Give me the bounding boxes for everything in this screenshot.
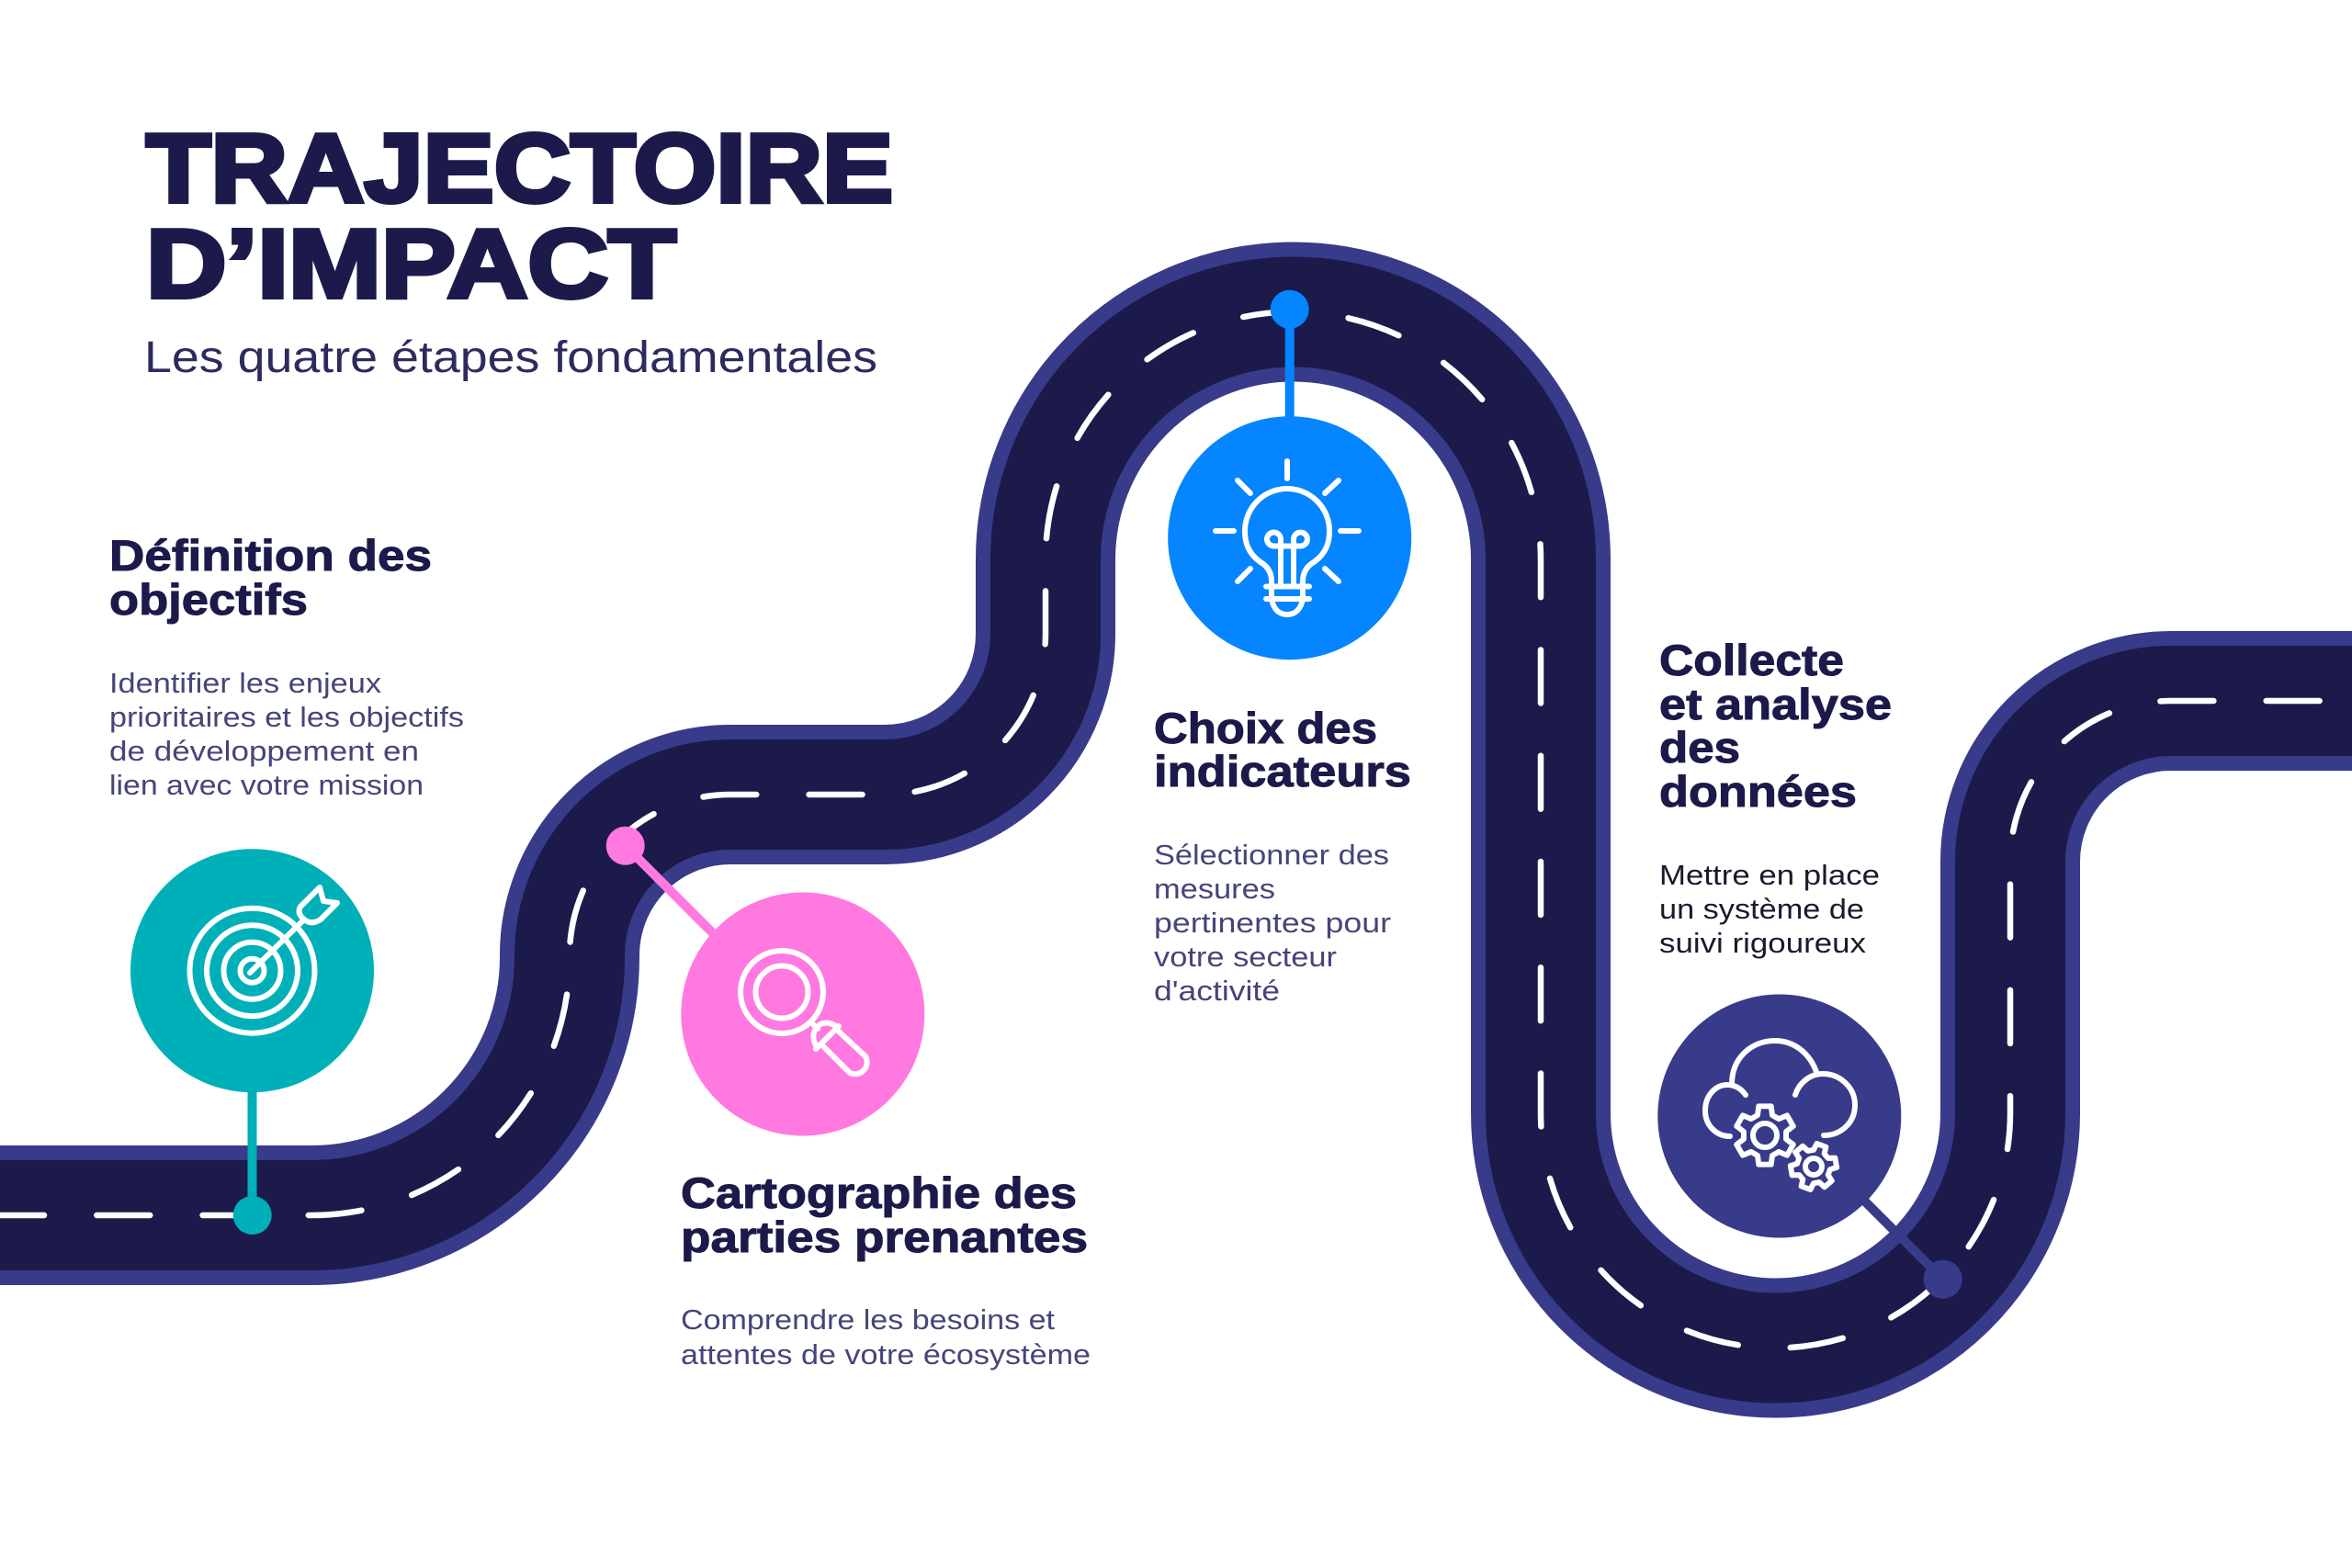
description [681,1303,1091,1371]
heading: Collecte [1659,636,1844,684]
heading: indicateurs [1154,747,1411,795]
step 4: data [1657,636,1962,1299]
description: Mettre en place [1659,859,1880,891]
description: Comprendre les besoins et [681,1303,1055,1336]
connector and node [1271,290,1309,427]
description [1154,839,1391,1007]
description: un système de [1659,893,1864,925]
heading [681,1168,1088,1261]
description [1659,859,1880,959]
description: suivi rigoureux [1659,927,1867,959]
description: prioritaires et les objectifs [109,701,464,733]
description: Sélectionner des [1154,839,1389,871]
description: pertinentes pour [1154,907,1391,939]
heading [1659,636,1892,816]
step 1: objectives [109,531,464,1235]
description: attentes de votre écosystème [681,1338,1091,1371]
heading: Cartographie des [681,1168,1077,1217]
description: de développement en [109,735,419,767]
title: D’IMPACT [146,209,676,318]
description: votre secteur [1154,941,1337,973]
connector and node [233,1084,272,1235]
description: Identifier les enjeux [109,667,382,699]
heading [109,531,432,624]
heading: Définition des [109,531,432,580]
heading [1154,704,1411,795]
icon circle: cloud and gears [1657,994,1901,1238]
step 2: stakeholders [606,827,1091,1371]
heading: objectifs [109,575,308,624]
road [0,312,2352,1348]
heading: des [1659,723,1740,772]
step 3: indicators [1154,290,1411,1007]
subtitle: Les quatre étapes fondamentales [144,333,877,382]
description: lien avec votre mission [109,769,424,801]
icon circle: target [130,849,374,1092]
description: d'activité [1154,975,1280,1007]
icon circle: light bulb [1168,416,1411,660]
heading: parties prenantes [681,1213,1088,1261]
heading: et analyse [1659,680,1892,728]
title [146,114,893,318]
heading: Choix des [1154,704,1377,752]
icon circle: magnifier [681,893,924,1135]
title: TRAJECTOIRE [146,114,893,222]
description: mesures [1154,873,1275,905]
connector and node [606,827,726,946]
connector and node [1856,1192,1962,1299]
heading: données [1659,767,1857,816]
description [109,667,464,801]
